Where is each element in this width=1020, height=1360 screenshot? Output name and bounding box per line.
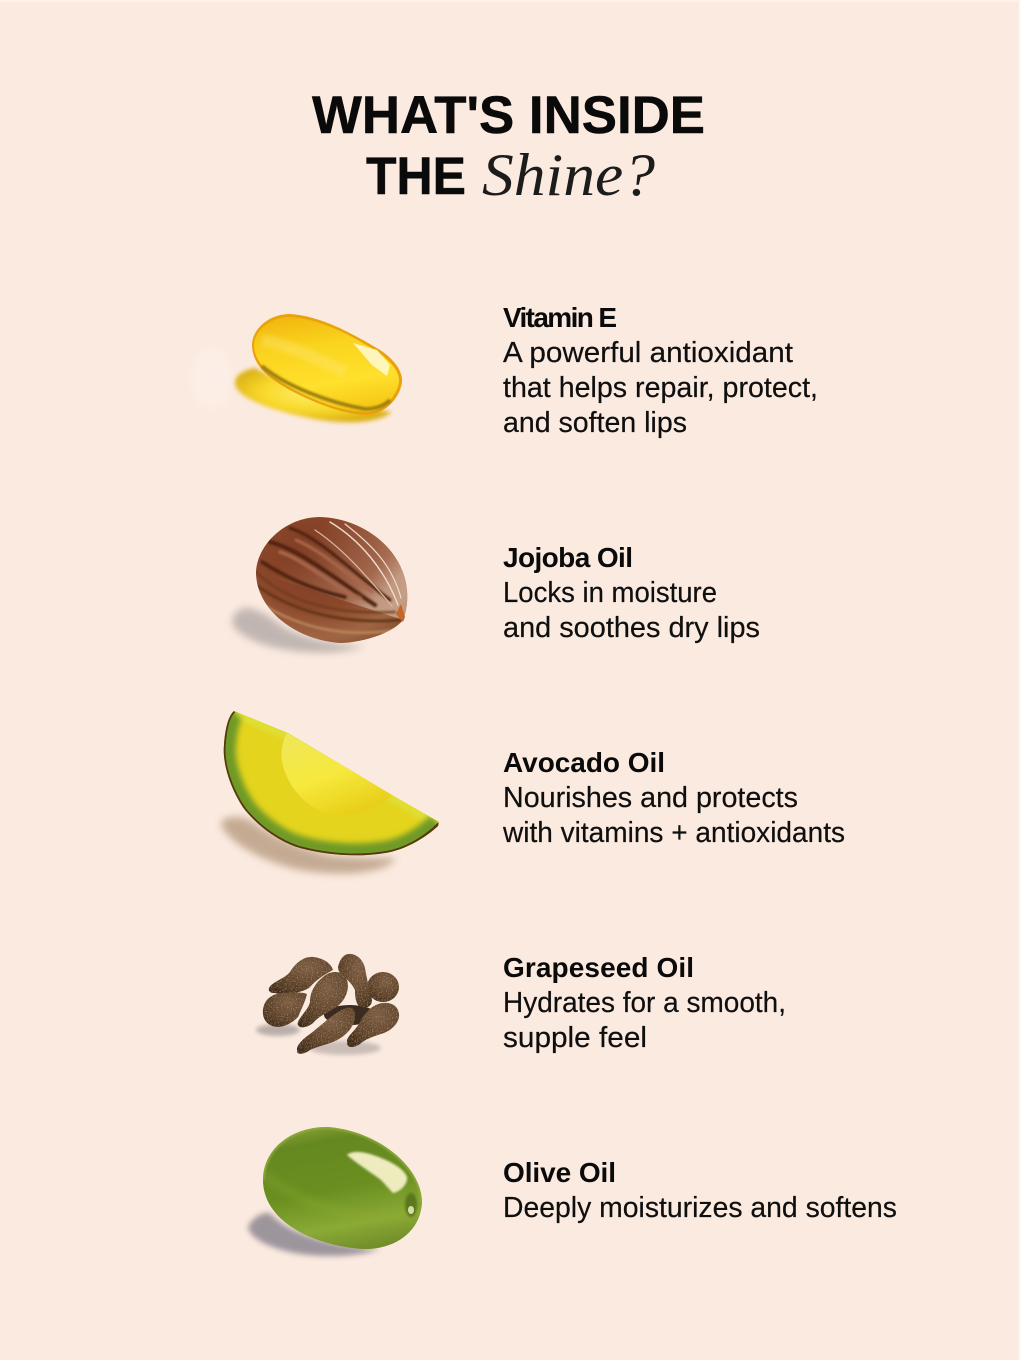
title: THE <box>366 147 466 206</box>
title: Shine? <box>482 142 655 208</box>
text block: Grapeseed Oil: Grapeseed Oil <box>503 952 694 983</box>
text block: Vitamin E: and soften lips <box>503 407 687 439</box>
text block: Jojoba Oil: Locks in moisture <box>503 577 717 609</box>
text block: Grapeseed Oil <box>503 952 786 1054</box>
icon: grape seeds <box>256 954 399 1055</box>
text block: Vitamin E: A powerful antioxidant <box>503 337 793 369</box>
text block: Olive Oil: Deeply moisturizes and softens <box>503 1192 897 1224</box>
text block: Jojoba Oil <box>503 542 760 644</box>
text block: Jojoba Oil: and soothes dry lips <box>503 612 760 644</box>
icon: jojoba nut <box>232 517 407 653</box>
text block: Vitamin E <box>503 302 818 439</box>
title: WHAT'S INSIDE <box>312 86 705 145</box>
text block: Olive Oil <box>503 1157 897 1224</box>
text block: Avocado Oil: Avocado Oil <box>503 747 665 778</box>
text block: Avocado Oil <box>502 747 845 849</box>
text block: Jojoba Oil: Jojoba Oil <box>503 542 633 573</box>
text block: Avocado Oil: with vitamins + antioxidants <box>502 817 845 849</box>
text block: Avocado Oil: Nourishes and protects <box>503 782 798 814</box>
icon: avocado slice <box>221 711 439 874</box>
text block: Grapeseed Oil: Hydrates for a smooth, <box>503 987 786 1019</box>
text block: Grapeseed Oil: supple feel <box>503 1022 647 1054</box>
title <box>312 86 705 208</box>
icon: green olive <box>248 1127 422 1256</box>
text block: Vitamin E: Vitamin E <box>503 302 617 333</box>
icon: vitamin E capsule <box>192 314 402 422</box>
text block: Vitamin E: that helps repair, protect, <box>503 372 818 404</box>
text block: Olive Oil: Olive Oil <box>503 1157 616 1188</box>
